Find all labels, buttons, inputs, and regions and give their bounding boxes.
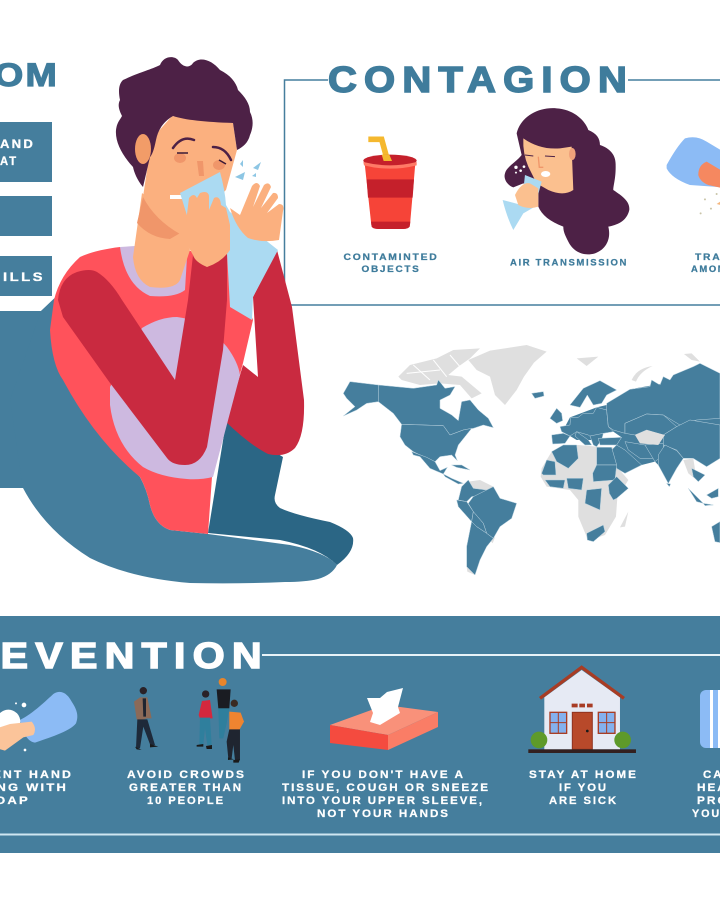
label: tissue advice: NOT YOUR HANDS <box>317 808 450 820</box>
panel: contagion <box>284 59 720 305</box>
figure: eyes and brows <box>170 139 231 199</box>
symptom box: sore throat <box>0 122 52 182</box>
figure: hair <box>116 57 253 187</box>
label: contaminated objects: CONTAMINTED <box>344 252 438 263</box>
label: transmission among people <box>691 252 720 275</box>
label: avoid crowds: 10 PEOPLE <box>147 795 225 807</box>
panel: symptoms <box>0 57 75 488</box>
symptom box: chills: ILLS <box>3 270 45 284</box>
label: tissue advice: TISSUE, COUGH OR SNEEZE <box>282 782 490 794</box>
label: call your healthcare provider <box>692 769 720 820</box>
contagion frame <box>284 80 720 305</box>
label: avoid crowds <box>127 769 246 807</box>
icon: hand washing <box>0 692 77 751</box>
label: tissue advice: IF YOU DON'T HAVE A <box>302 769 465 781</box>
figure: lavender belly <box>110 317 240 479</box>
icon: house <box>528 667 636 753</box>
label: contaminated objects <box>344 252 438 275</box>
person in black shirt <box>217 678 231 738</box>
symptom box: large cropped panel <box>0 311 75 488</box>
figure: face <box>143 116 237 234</box>
map: unaffected land <box>398 345 700 575</box>
figure: right arm <box>226 250 304 455</box>
person in orange shirt <box>227 700 244 763</box>
label: avoid crowds: AVOID CROWDS <box>127 769 246 781</box>
label: stay at home: STAY AT HOME <box>529 769 638 781</box>
figure: neck <box>133 193 190 288</box>
icon: people distancing <box>134 678 244 763</box>
figure: open hand <box>230 183 284 241</box>
symptom box: sore throat: AT <box>0 154 18 168</box>
map: central asia unaffected <box>635 430 665 445</box>
label: air transmission: AIR TRANSMISSION <box>510 258 628 268</box>
label: tissue advice <box>282 769 490 820</box>
map: affected countries <box>343 363 720 575</box>
bottom line <box>0 834 720 836</box>
label: hand washing <box>0 769 73 807</box>
prevention band <box>0 616 720 853</box>
illustration: man sneezing <box>0 57 353 583</box>
symptom box: chills <box>0 256 52 296</box>
label: stay at home: ARE SICK <box>549 795 618 807</box>
label: stay at home <box>529 769 638 807</box>
figure: red shirt <box>50 247 253 534</box>
icon: phone <box>700 690 720 748</box>
figure: left arm <box>58 253 227 465</box>
icon: contaminated cup <box>363 139 417 229</box>
panel: prevention <box>0 616 720 853</box>
figure: collar <box>120 246 187 296</box>
icon: hand with germs <box>667 137 720 214</box>
map: arctic island gaps <box>407 355 460 380</box>
figure: hand holding tissue <box>180 192 230 267</box>
heading: contagion: CONTAGION <box>328 59 634 100</box>
figure: back and legs <box>0 293 353 583</box>
symptom box: sore throat: AND <box>0 137 35 151</box>
heading line <box>262 654 720 656</box>
person in red <box>197 690 213 749</box>
figure: neck shadow <box>137 197 182 239</box>
symptom box: large cropped panel: E <box>0 382 10 396</box>
figure: tissue <box>180 172 278 320</box>
figure: sneeze droplets <box>235 160 261 180</box>
label: avoid crowds: GREATER THAN <box>129 782 243 794</box>
label: tissue advice: INTO YOUR UPPER SLEEVE, <box>282 795 484 807</box>
label: contaminated objects: OBJECTS <box>362 264 420 275</box>
symptom box: blank fragment <box>0 196 52 236</box>
icon: tissue box <box>330 688 438 750</box>
icon: woman coughing <box>503 108 629 254</box>
map: affected land underlay <box>563 373 720 483</box>
person in brown coat <box>134 687 158 750</box>
label: stay at home: IF YOU <box>559 782 608 794</box>
world map <box>343 345 720 575</box>
figure: ear <box>135 134 151 164</box>
